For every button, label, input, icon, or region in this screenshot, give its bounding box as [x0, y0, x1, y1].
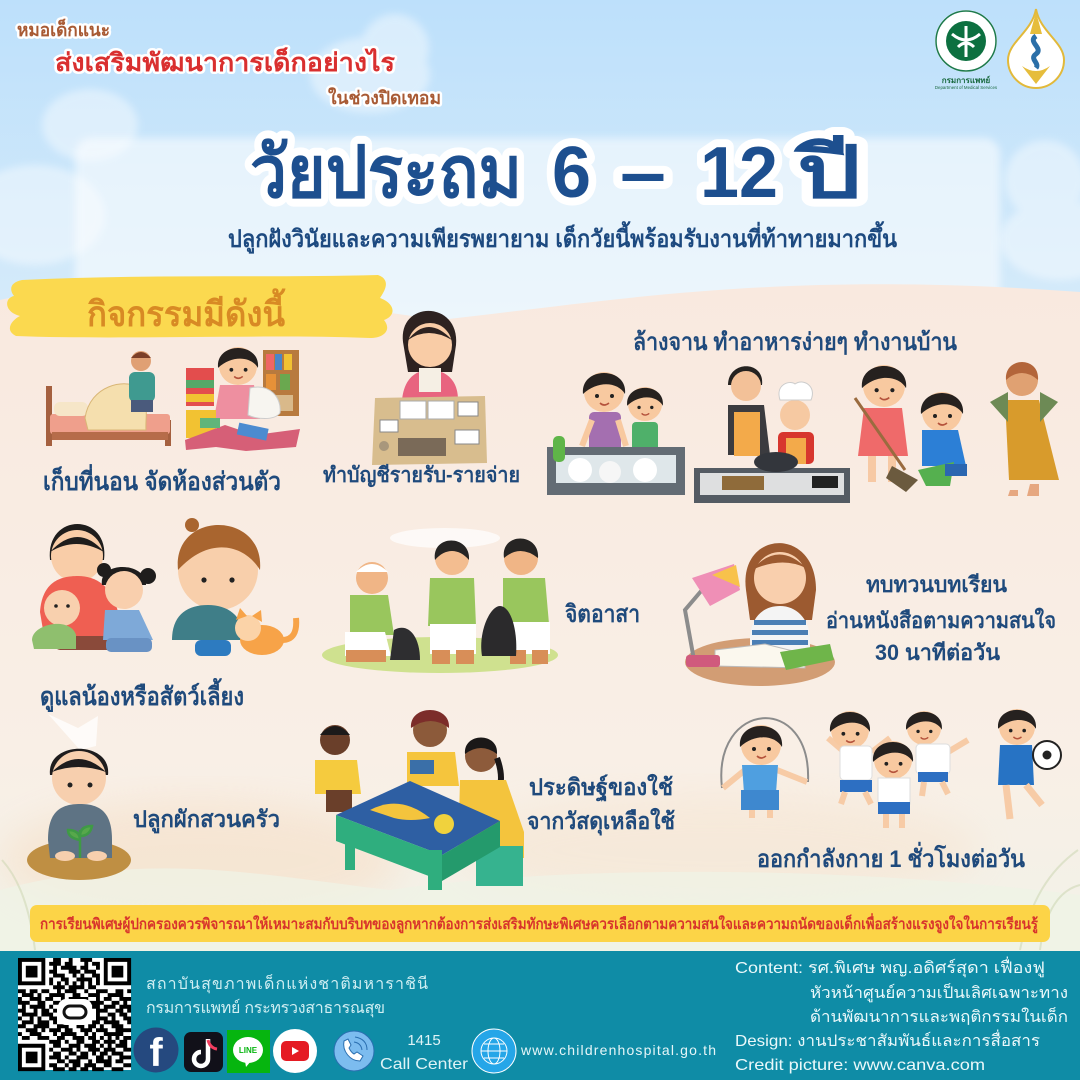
credits: ด้านพัฒนาการและพฤติกรรมในเด็ก — [810, 1006, 1068, 1026]
website: www.childrenhospital.go.th — [520, 1042, 716, 1058]
text: review lessons: 30 นาทีต่อวัน — [875, 640, 1000, 665]
illustration: accounting girl — [372, 311, 487, 465]
illustration: making bed and tidying room — [46, 347, 300, 451]
footer panel — [0, 951, 1080, 1080]
icon: line: LINE — [239, 1046, 258, 1055]
logo: institute gold drop — [1008, 9, 1064, 88]
call center — [380, 1032, 469, 1073]
illustration: sweeping floor — [855, 365, 967, 492]
label: ปลูกผักสวนครัว — [133, 806, 280, 834]
header: small titles: ส่งเสริมพัฒนาการเด็กอย่างไร — [55, 47, 396, 77]
text: review lessons: ทบทวนบทเรียน — [866, 572, 1007, 597]
label: ออกกำลังกาย 1 ชั่วโมงต่อวัน — [757, 841, 1026, 873]
label: ทำบัญชีรายรับ-รายจ่าย — [323, 463, 520, 488]
illustration: washing dishes — [547, 372, 685, 495]
illustration: folding clothes — [990, 362, 1059, 496]
text: recycled crafts: จากวัสดุเหลือใช้ — [527, 807, 675, 836]
icon: youtube — [273, 1029, 317, 1073]
banner: activities heading — [7, 275, 393, 338]
icon: phone — [334, 1031, 374, 1071]
icon: facebook — [134, 1028, 178, 1075]
credits: Design: งานประชาสัมพันธ์และการสื่อสาร — [735, 1029, 1040, 1050]
banner: activities heading: กิจกรรมมีดังนี้ — [87, 288, 286, 334]
icon: globe — [472, 1029, 516, 1073]
institute name — [146, 973, 428, 1018]
logo: department of medical services: กรมการแพทย์ — [942, 75, 991, 85]
illustration: recycled crafts — [315, 710, 524, 890]
main title: 12 — [700, 133, 778, 213]
text: recycled crafts: ประดิษฐ์ของใช้ — [529, 773, 673, 802]
header: small titles — [17, 18, 441, 108]
main title: 6 — [552, 133, 591, 213]
institute name: กรมการแพทย์ กระทรวงสาธารณสุข — [146, 998, 385, 1018]
label: ดูแลน้องหรือสัตว์เลี้ยง — [40, 677, 244, 713]
logo: department of medical services — [935, 10, 998, 90]
header: small titles: หมอเด็กแนะ — [17, 18, 110, 40]
main title: ปี — [792, 133, 861, 213]
text: review lessons — [826, 572, 1056, 665]
label: ล้างจาน ทำอาหารง่ายๆ ทำงานบ้าน — [633, 329, 958, 356]
icon: facebook: f — [149, 1031, 163, 1075]
illustration: cooking — [694, 366, 850, 503]
QR code — [18, 958, 131, 1070]
text: review lessons: อ่านหนังสือตามความสนใจ — [826, 607, 1056, 633]
illustration: exercising children — [721, 709, 1061, 828]
label: เก็บที่นอน จัดห้องส่วนตัว — [43, 464, 281, 496]
credits: Content: รศ.พิเศษ พญ.อดิศร์สุดา เฟื่องฟู — [735, 956, 1045, 978]
callout: special classes note — [30, 905, 1050, 942]
main title: – — [620, 133, 666, 213]
call center: 1415 — [407, 1032, 441, 1049]
label: จิตอาสา — [565, 601, 640, 628]
illustration: caring for sibling — [32, 518, 296, 656]
header: small titles: ในช่วงปิดเทอม — [328, 87, 441, 108]
text: recycled crafts — [527, 773, 675, 836]
subtitle: ปลูกฝังวินัยและความเพียรพยายาม เด็กวัยนี้พร้อมรับงานที่ท้าทายมากขึ้น — [228, 220, 898, 254]
credits — [735, 956, 1068, 1074]
call center: Call Center — [380, 1056, 469, 1073]
icon: line — [227, 1030, 270, 1073]
illustration: volunteers collecting trash — [322, 528, 558, 673]
illustration: studying child — [685, 543, 835, 686]
logo: department of medical services: Department of Medical Services — [935, 85, 998, 90]
illustration: planting vegetables — [27, 714, 131, 880]
icon: tiktok — [184, 1032, 223, 1072]
main title: วัยประถม — [250, 133, 522, 213]
credits: หัวหน้าศูนย์ความเป็นเลิศเฉพาะทาง — [810, 982, 1068, 1003]
main title — [250, 133, 861, 213]
institute name: สถาบันสุขภาพเด็กแห่งชาติมหาราชินี — [146, 973, 428, 994]
credits: Credit picture: www.canva.com — [735, 1057, 985, 1074]
